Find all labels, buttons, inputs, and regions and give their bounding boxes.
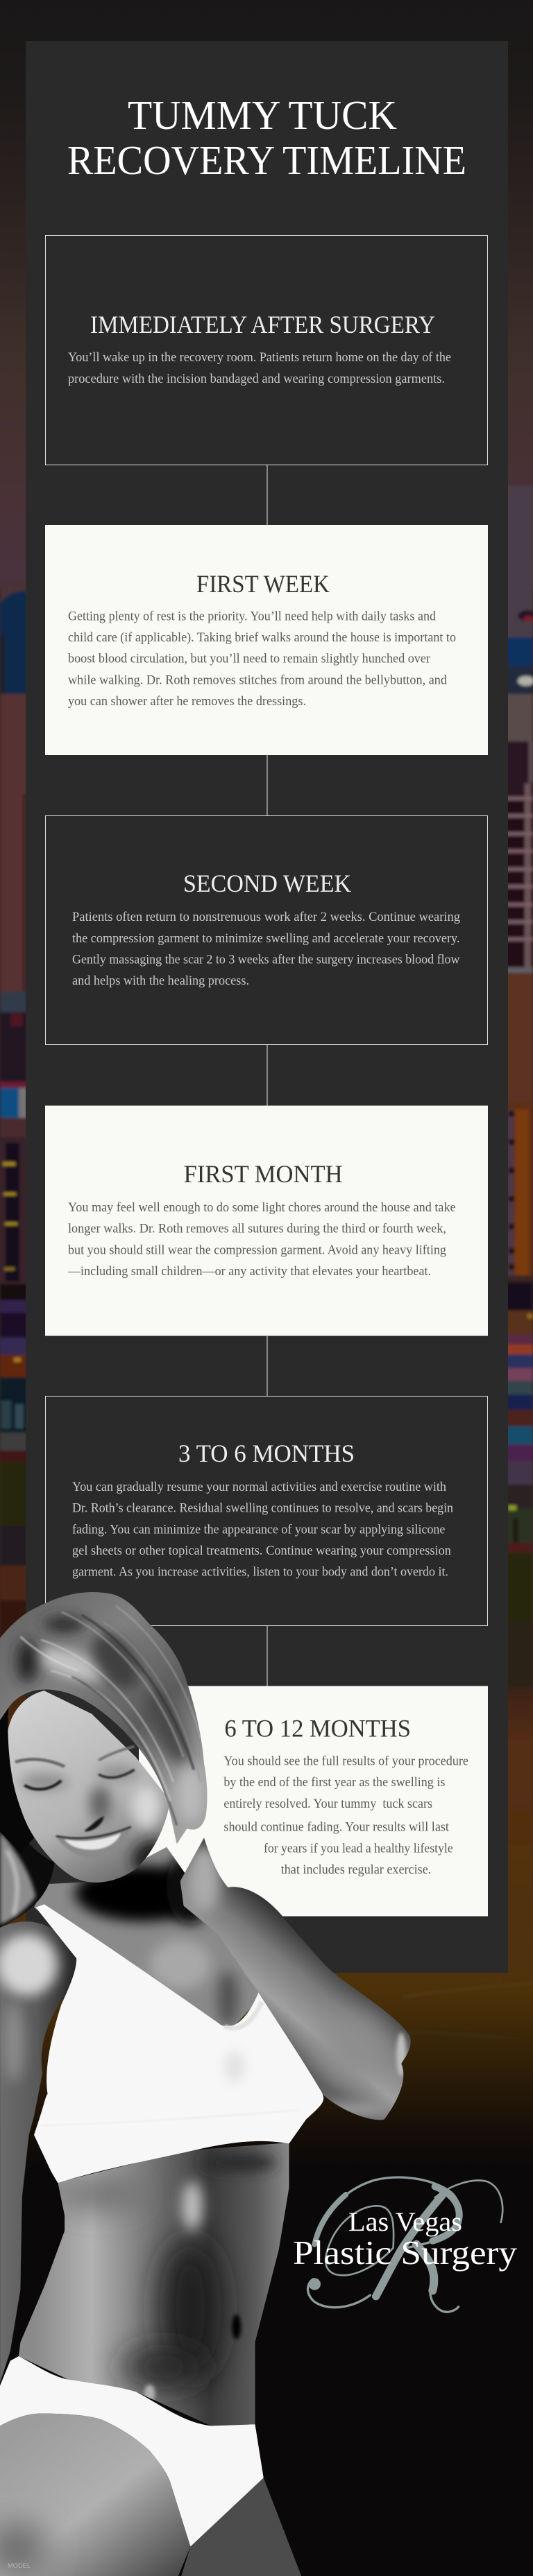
panel: immediately after surgery	[46, 236, 487, 465]
body text: Dr. Roth’s clearance. Residual swelling continues to resolve, and scars begin	[72, 1501, 453, 1516]
body text: should continue fading. Your results will last	[223, 1819, 450, 1835]
timeline connector	[266, 465, 268, 1686]
heading: SECOND WEEK	[183, 870, 351, 897]
logo monogram: script R	[308, 2177, 502, 2312]
body text: procedure with the incision bandaged and wearing compression garments.	[68, 372, 445, 386]
body text: longer walks. Dr. Roth removes all sutures during the third or fourth week,	[68, 1222, 446, 1236]
right strip	[505, 485, 533, 637]
dark hair behind temple	[0, 1708, 34, 1853]
body text	[68, 350, 451, 386]
panel: 6 to 12 months	[139, 1686, 488, 1917]
logo: Las Vegas Plastic Surgery	[293, 2177, 518, 2312]
body text: Getting plenty of rest is the priority. You’ll need help with daily tasks and	[68, 609, 436, 624]
body text: but you should still wear the compression garment. Avoid any heavy lifting	[68, 1243, 446, 1257]
title: TUMMY TUCK	[128, 92, 397, 138]
body text: the compression garment to minimize swelling and accelerate your recovery.	[72, 931, 459, 946]
body text: gel sheets or other topical treatments. Continue wearing your compression	[72, 1544, 451, 1558]
body text: You may feel well enough to do some light chores around the house and take	[68, 1200, 456, 1215]
chest and neck	[34, 1847, 262, 2030]
body text: Gently massaging the scar 2 to 3 weeks after the surgery increases blood flow	[72, 952, 460, 967]
panel: first month	[45, 1105, 488, 1335]
model disclaimer: MODEL	[8, 2562, 31, 2569]
body text: You should see the full results of your procedure	[223, 1754, 468, 1768]
heading: FIRST WEEK	[196, 570, 330, 598]
logo: Las Vegas Plastic Surgery: Las Vegas	[348, 2207, 462, 2237]
panel: second week	[46, 815, 487, 1044]
panel: 3 to 6 months	[46, 1397, 487, 1625]
face	[7, 1691, 174, 1883]
facial features	[15, 1747, 135, 1858]
heading: IMMEDIATELY AFTER SURGERY	[90, 311, 435, 338]
body text	[72, 910, 460, 988]
body text: entirely resolved. Your tummy tuck scars	[223, 1797, 432, 1811]
body text: by the end of the first year as the swelling is	[223, 1775, 445, 1790]
heading: 3 TO 6 MONTHS	[178, 1440, 355, 1467]
woman model figure	[0, 1592, 411, 2576]
body text: child care (if applicable). Taking brief walks around the house is important to	[68, 630, 456, 645]
body text: You can gradually resume your normal activities and exercise routine with	[72, 1480, 446, 1494]
title: RECOVERY TIMELINE	[67, 137, 466, 183]
body text: and helps with the healing process.	[72, 974, 249, 988]
left hair lock	[0, 1807, 54, 1928]
body text: that includes regular exercise.	[281, 1862, 431, 1877]
water streaks	[403, 1983, 533, 1997]
body text	[72, 1480, 453, 1580]
title	[67, 92, 466, 183]
left strip	[0, 582, 28, 700]
logo: Las Vegas Plastic Surgery: Plastic Surgery	[293, 2233, 518, 2272]
hair	[0, 1592, 207, 1844]
body text: —including small children—or any activity that elevates your heartbeat.	[67, 1264, 431, 1279]
underwear	[0, 2356, 264, 2547]
body text: you can shower after he removes the dressings.	[68, 694, 306, 709]
heading: 6 TO 12 MONTHS	[224, 1714, 411, 1742]
sports bra	[34, 1904, 323, 2183]
body text	[67, 1200, 456, 1279]
torso	[19, 2143, 289, 2426]
body text	[223, 1754, 468, 1877]
body text: Patients often return to nonstrenuous work after 2 weeks. Continue wearing	[72, 910, 460, 924]
panel: first week	[45, 525, 488, 755]
body text: boost blood circulation, but you’ll need to remain slightly hunched over	[68, 652, 431, 666]
body text: garment. As you increase activities, listen to your body and don’t overdo it.	[72, 1564, 448, 1580]
body text: fading. You can minimize the appearance of your scar by applying silicone	[72, 1522, 445, 1537]
body text: for years if you lead a healthy lifestyle	[264, 1841, 453, 1856]
body text	[68, 609, 456, 709]
body text: while walking. Dr. Roth removes stitches from around the bellybutton, and	[68, 673, 447, 687]
left arm and shoulder	[0, 1921, 74, 2383]
body text: You’ll wake up in the recovery room. Patients return home on the day of the	[68, 350, 451, 365]
raised arm	[180, 1838, 411, 2120]
left thigh	[0, 2414, 190, 2576]
background: city buildings strips	[0, 485, 533, 2042]
right thigh	[180, 2478, 303, 2576]
heading: FIRST MONTH	[184, 1160, 343, 1188]
main dark panel	[26, 41, 508, 1973]
